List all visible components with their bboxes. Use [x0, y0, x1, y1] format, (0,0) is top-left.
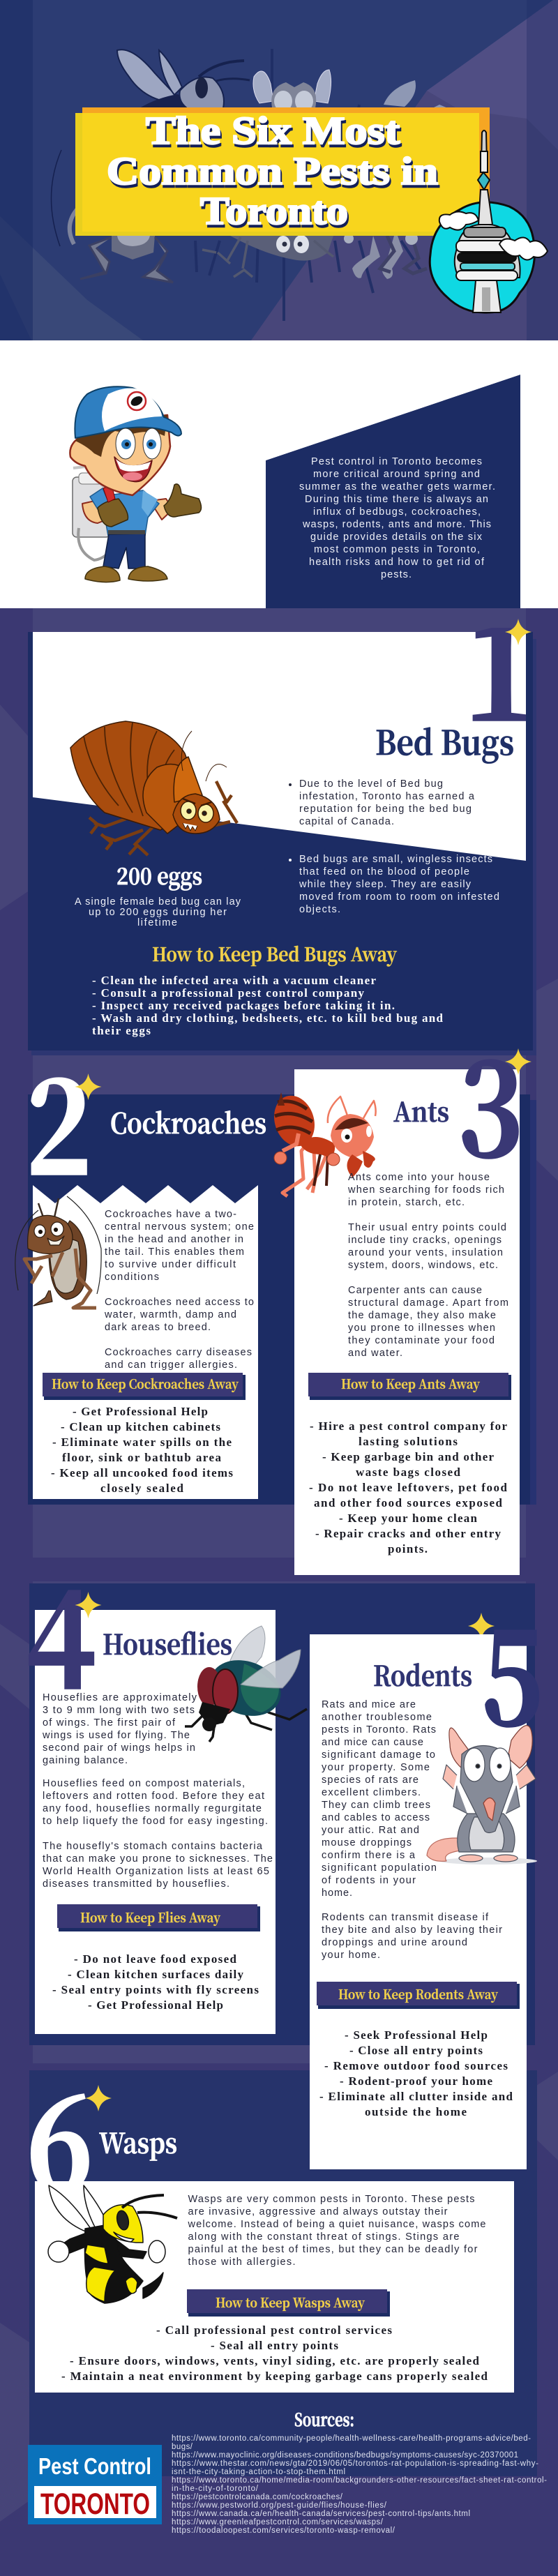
cockroach tips: floor, sink or bathtub area — [62, 1451, 222, 1464]
rodent facts: droppings and urine around — [322, 1937, 467, 1948]
housefly facts: that can make you prone to sicknesses. The — [43, 1853, 273, 1865]
zigzag white card — [33, 1185, 258, 1499]
cockroach facts: Cockroaches need access to — [105, 1297, 254, 1308]
source list: https://toodaloopest.com/services/toronto-wasp-removal/ — [172, 2526, 395, 2535]
ant facts: around your vents, insulation — [348, 1247, 503, 1258]
panel: rodents — [310, 1574, 543, 2169]
ant facts: structural damage. Apart from — [348, 1297, 508, 1309]
ghost cockroach — [112, 236, 155, 259]
housefly facts: World Health Organization lists at least 65 — [43, 1866, 269, 1877]
intro text: wasps, rodents, ants and more. This — [302, 519, 491, 530]
icon: sparkle — [85, 2085, 112, 2111]
housefly facts: leftovers and rotten food. Before they eat — [43, 1791, 264, 1802]
rodent facts: Rats and mice are — [322, 1699, 416, 1710]
intro text: influx of bedbugs, cockroaches, — [313, 506, 481, 518]
ant facts: you prone to illnesses when — [348, 1323, 495, 1334]
cockroach tips — [51, 1405, 233, 1495]
button: how to keep rodents away — [317, 1982, 520, 2009]
rodent facts: confirm there is a — [322, 1850, 416, 1861]
logo: Pest Control Toronto: TORONTO — [40, 2487, 150, 2521]
rodent facts: your home. — [322, 1950, 380, 1961]
title: Common Pests in — [107, 150, 438, 193]
source list — [172, 2434, 547, 2535]
housefly facts: to help liquefy the food for easy ingesting. — [43, 1816, 268, 1827]
cockroach facts: Cockroaches carry diseases — [105, 1347, 252, 1358]
panel: ants — [268, 1005, 531, 1575]
cockroach facts: Cockroaches have a two- — [105, 1209, 236, 1220]
panel: bed bugs — [28, 619, 536, 1055]
heading: houseflies: Houseflies — [103, 1623, 232, 1663]
intro text: Pest control in Toronto becomes — [311, 456, 482, 467]
numeral 6: 6 — [27, 2040, 93, 2228]
stat: 200 eggs: 200 eggs — [116, 859, 202, 891]
rodent facts — [322, 1699, 502, 1961]
bed bug tips: their eggs — [92, 1024, 151, 1037]
bed bug tips: - Consult a professional pest control company — [92, 986, 364, 1000]
cockroach facts: central nervous system; one — [105, 1221, 254, 1233]
ant tips: lasting solutions — [359, 1435, 458, 1448]
button: how to keep cockroaches away: How to Keep Cockroaches Away — [52, 1374, 239, 1393]
heading: sources: Sources: — [294, 2406, 354, 2432]
wasp facts: are invasive, aggressive and always outstay their — [188, 2206, 448, 2217]
ant facts: Their usual entry points could — [348, 1222, 506, 1233]
wasp facts — [187, 2194, 485, 2268]
cockroach facts: the tail. This enables them — [105, 1246, 244, 1258]
button: how to keep cockroaches away — [43, 1373, 246, 1400]
ant tips — [309, 1419, 508, 1556]
illustration: housefly — [185, 1626, 307, 1742]
cockroach facts: in the head and another in — [105, 1234, 243, 1245]
heading: wasps: Wasps — [99, 2122, 177, 2162]
bed bug tips — [92, 974, 444, 1037]
button: how to keep wasps away: How to Keep Wasps Away — [216, 2293, 365, 2312]
wasp tips — [61, 2323, 488, 2383]
bed bug facts — [289, 778, 499, 915]
cockroach facts: conditions — [105, 1272, 159, 1283]
wasp facts: Wasps are very common pests in Toronto. These pests — [188, 2194, 474, 2205]
ant facts: and water. — [348, 1348, 402, 1359]
rodent facts: They can climb trees — [322, 1800, 430, 1811]
bed bug facts: moved from room to room on infested — [299, 891, 499, 903]
rodent facts: another troublesome — [322, 1712, 432, 1723]
sources — [172, 2406, 547, 2535]
rodent tips: - Eliminate all clutter inside and — [319, 2090, 513, 2103]
heading: how to keep bed bugs away: How to Keep Bed Bugs Away — [152, 940, 397, 967]
hero banner — [0, 0, 558, 340]
rodent facts: they bite and also by leaving their — [322, 1925, 502, 1936]
rodent facts: and mice can cause — [322, 1737, 423, 1748]
rodent tips: - Rodent-proof your home — [340, 2074, 492, 2088]
ant tips: waste bags closed — [356, 1466, 461, 1479]
cockroach tips: - Eliminate water spills on the — [52, 1436, 232, 1449]
bed bug facts: Bed bugs are small, wingless insects — [299, 854, 492, 865]
rodent facts: home. — [322, 1888, 352, 1899]
housefly facts: any food, houseflies normally regurgitate — [43, 1803, 262, 1814]
wasp tips: - Call professional pest control services — [156, 2323, 392, 2337]
ant facts: when searching for foods rich — [347, 1184, 504, 1196]
source list: https://www.pestworld.org/pest-guide/flies/house-flies/ — [172, 2501, 387, 2510]
icon: CN Tower — [430, 130, 548, 312]
housefly facts: gaining balance. — [43, 1755, 128, 1766]
cockroach facts: dark areas to breed. — [105, 1322, 211, 1333]
title: Toronto — [200, 190, 348, 233]
stat: 200 eggs: A single female bed bug can lay — [75, 896, 241, 907]
panel: wasps — [27, 2040, 514, 2393]
rodent facts: Rodents can transmit disease if — [322, 1912, 489, 1923]
bed bug tips: - Inspect any received packages before taking it in. — [92, 999, 395, 1012]
wasp facts: those with allergies. — [188, 2257, 296, 2268]
rodent tips: - Seek Professional Help — [345, 2028, 488, 2042]
cockroach facts — [104, 1209, 254, 1371]
ant facts: Carpenter ants can cause — [348, 1285, 482, 1296]
ant tips: and other food sources exposed — [314, 1496, 503, 1509]
housefly tips: - Get Professional Help — [88, 1998, 223, 2012]
rodent facts: excellent climbers. — [322, 1787, 421, 1798]
ant facts: they contaminate your food — [348, 1335, 495, 1346]
ant facts: in protein, starch, etc. — [348, 1197, 465, 1208]
cockroach facts: to survive under difficult — [105, 1259, 236, 1270]
rodent tips: outside the home — [365, 2105, 467, 2118]
bed bug tips: - Wash and dry clothing, bedsheets, etc. to kill bed bug and — [92, 1011, 444, 1025]
source list: bugs/ — [172, 2443, 193, 2451]
button: how to keep wasps away — [187, 2289, 390, 2317]
housefly facts: Houseflies feed on compost materials, — [43, 1778, 245, 1789]
panel: houseflies and rodents backdrop — [29, 1581, 535, 2045]
wasp facts: along with the constant threat of stings. Stings are — [188, 2231, 459, 2243]
rodent tips: - Remove outdoor food sources — [324, 2059, 508, 2072]
bed bug facts: infestation, Toronto has earned a — [299, 791, 475, 802]
wasp facts: painful at the best of times, but they can be deadly for — [188, 2244, 478, 2255]
rodent tips — [319, 2028, 513, 2118]
stat: 200 eggs — [75, 859, 241, 928]
housefly facts: Houseflies are approximately — [43, 1692, 197, 1703]
heading: rodents: Rodents — [373, 1655, 472, 1694]
numeral 4: 4 — [27, 1535, 96, 1724]
bed bug facts: that feed on the blood of people — [299, 866, 469, 878]
stat: 200 eggs: up to 200 eggs during her — [89, 907, 227, 918]
housefly tips: - Seal entry points with fly screens — [52, 1983, 259, 1996]
ant facts: the damage, they also make — [348, 1310, 496, 1321]
button: how to keep rodents away: How to Keep Rodents Away — [338, 1984, 499, 2003]
title card — [75, 107, 490, 236]
ant tips: - Do not leave leftovers, pet food — [309, 1481, 508, 1494]
cockroach tips: - Clean up kitchen cabinets — [61, 1420, 220, 1433]
rodent tips: - Close all entry points — [349, 2044, 483, 2057]
button: how to keep ants away: How to Keep Ants Away — [341, 1374, 481, 1393]
housefly facts: of wings. The first pair of — [43, 1717, 176, 1728]
bed bug facts: reputation for being the bed bug — [299, 804, 472, 815]
panel: houseflies — [27, 1535, 307, 2034]
numeral 2: 2 — [26, 1023, 91, 1212]
title: The Six Most — [146, 110, 400, 153]
ant tips: points. — [388, 1542, 428, 1556]
housefly facts: 3 to 9 mm long with two sets — [43, 1705, 195, 1716]
ant facts: Ants come into your house — [348, 1172, 490, 1183]
housefly facts — [42, 1692, 273, 1890]
heading: ants: Ants — [393, 1091, 449, 1129]
stat: 200 eggs: lifetime — [137, 917, 177, 928]
illustration: pest control technician — [70, 386, 202, 582]
source list: https://www.canada.ca/en/health-canada/services/pest-control-tips/ants.html — [172, 2510, 470, 2518]
bed bug facts: Due to the level of Bed bug — [299, 778, 443, 790]
bed bug facts: capital of Canada. — [299, 816, 394, 827]
housefly facts: diseases transmitted by houseflies. — [43, 1878, 229, 1890]
icon: sparkle — [75, 1074, 102, 1100]
icon: sparkle — [505, 1048, 531, 1075]
wasp tips: - Ensure doors, windows, vents, vinyl siding, etc. are properly sealed — [70, 2354, 480, 2367]
button: how to keep flies away: How to Keep Flies Away — [80, 1908, 221, 1927]
panel: cockroaches — [15, 1023, 536, 1505]
button: how to keep ants away — [308, 1373, 511, 1400]
bed bug tips: - Clean the infected area with a vacuum cleaner — [92, 974, 376, 987]
cockroach facts: water, warmth, damp and — [104, 1309, 236, 1320]
rodent facts: significant population — [322, 1862, 437, 1874]
source list: https://www.toronto.ca/home/media-room/backgrounders-other-resources/fact-sheet-rat-control- — [172, 2476, 547, 2485]
ant facts: include tiny cracks, openings — [348, 1235, 502, 1246]
source list: https://www.thestar.com/news/gta/2019/06/05/torontos-rat-population-is-spreading-fast-why- — [172, 2460, 538, 2468]
bed bug facts: objects. — [299, 904, 340, 915]
icon: sparkle — [468, 1613, 495, 1639]
intro text: health risks and how to get rid of — [309, 557, 485, 568]
numeral 5: 5 — [481, 1574, 543, 1762]
rodent facts: your attic. Rat and — [322, 1825, 419, 1836]
intro text: guide provides details on the six — [310, 532, 483, 543]
housefly facts: The housefly's stomach contains bacteria — [43, 1841, 263, 1852]
numeral 1: 1 — [463, 569, 537, 758]
ant facts: system, doors, windows, etc. — [348, 1260, 498, 1271]
illustration: rat — [427, 1726, 537, 1865]
source list: isnt-the-city-taking-action-to-stop-them.html — [172, 2468, 345, 2476]
intro text: During this time there is always an — [305, 494, 488, 505]
housefly tips — [52, 1952, 259, 2012]
logo: Pest Control Toronto — [28, 2445, 162, 2524]
rodent facts: your property. Some — [322, 1762, 430, 1773]
source list: https://www.mayoclinic.org/diseases-conditions/bedbugs/symptoms-causes/syc-20370001 — [172, 2451, 518, 2460]
logo: Pest Control Toronto: Pest Control — [38, 2453, 151, 2479]
rodent facts: mouse droppings — [322, 1837, 412, 1848]
ghost fly legs — [352, 236, 380, 278]
bed bug facts: while they sleep. They are easily — [299, 879, 472, 890]
panel: intro — [266, 363, 520, 608]
heading: bed bugs: Bed Bugs — [375, 716, 514, 764]
housefly tips: - Clean kitchen surfaces daily — [68, 1968, 244, 1981]
wasp tips: - Seal all entry points — [211, 2339, 338, 2352]
icon: sparkle — [75, 1592, 102, 1618]
intro text: most common pests in Toronto, — [314, 544, 480, 555]
background pests (ghosted) — [51, 49, 448, 321]
illustration: wasp — [48, 2185, 177, 2303]
wasp facts: welcome. Instead of being a quiet nuisance, wasps come — [187, 2219, 485, 2230]
cockroach tips: - Get Professional Help — [73, 1405, 208, 1418]
rodent facts: pests in Toronto. Rats — [322, 1724, 436, 1735]
housefly facts: wings is used for flying. The — [42, 1730, 190, 1741]
rodent facts: of rodents in your — [322, 1875, 416, 1886]
ant tips: - Hire a pest control company for — [310, 1419, 507, 1433]
cockroach tips: - Keep all uncooked food items — [51, 1466, 233, 1479]
illustration: bed bug — [70, 721, 237, 855]
illustration: ant — [268, 1090, 376, 1196]
intro text: more critical around spring and — [313, 469, 480, 480]
ant facts — [347, 1172, 508, 1359]
wasp tips: - Maintain a neat environment by keeping garbage cans properly sealed — [61, 2370, 488, 2383]
intro text: pests. — [381, 569, 412, 580]
housefly tips: - Do not leave food exposed — [74, 1952, 237, 1966]
cockroach facts: and can trigger allergies. — [105, 1359, 237, 1371]
intro text — [299, 456, 495, 580]
heading: cockroaches: Cockroaches — [110, 1102, 266, 1142]
icon: sparkle — [505, 619, 531, 645]
cockroach tips: closely sealed — [100, 1482, 184, 1495]
numeral 3: 3 — [458, 1005, 523, 1193]
intro text: summer as the weather gets warmer. — [299, 481, 495, 492]
rodent facts: and cables to access — [322, 1812, 430, 1823]
housefly facts: second pair of wings helps in — [43, 1742, 195, 1754]
rodent facts: species of rats are — [322, 1775, 418, 1786]
button: how to keep flies away — [57, 1904, 260, 1931]
ant tips: - Keep garbage bin and other — [322, 1450, 494, 1463]
ant tips: - Keep your home clean — [339, 1512, 478, 1525]
illustration: cockroach — [15, 1196, 101, 1308]
panel: wasps backdrop — [29, 2070, 537, 2476]
ghost bed bug — [230, 236, 333, 261]
ant tips: - Repair cracks and other entry — [315, 1527, 501, 1540]
source list: https://www.greenleafpestcontrol.com/services/wasps/ — [172, 2518, 384, 2526]
source list: in-the-city-of-toronto/ — [172, 2485, 259, 2493]
title — [107, 110, 438, 233]
rodent facts: significant damage to — [322, 1749, 435, 1761]
source list: https://www.toronto.ca/community-people/health-wellness-care/health-programs-advice/bed- — [172, 2434, 531, 2443]
source list: https://pestcontrolcanada.com/cockroaches/ — [172, 2493, 343, 2501]
